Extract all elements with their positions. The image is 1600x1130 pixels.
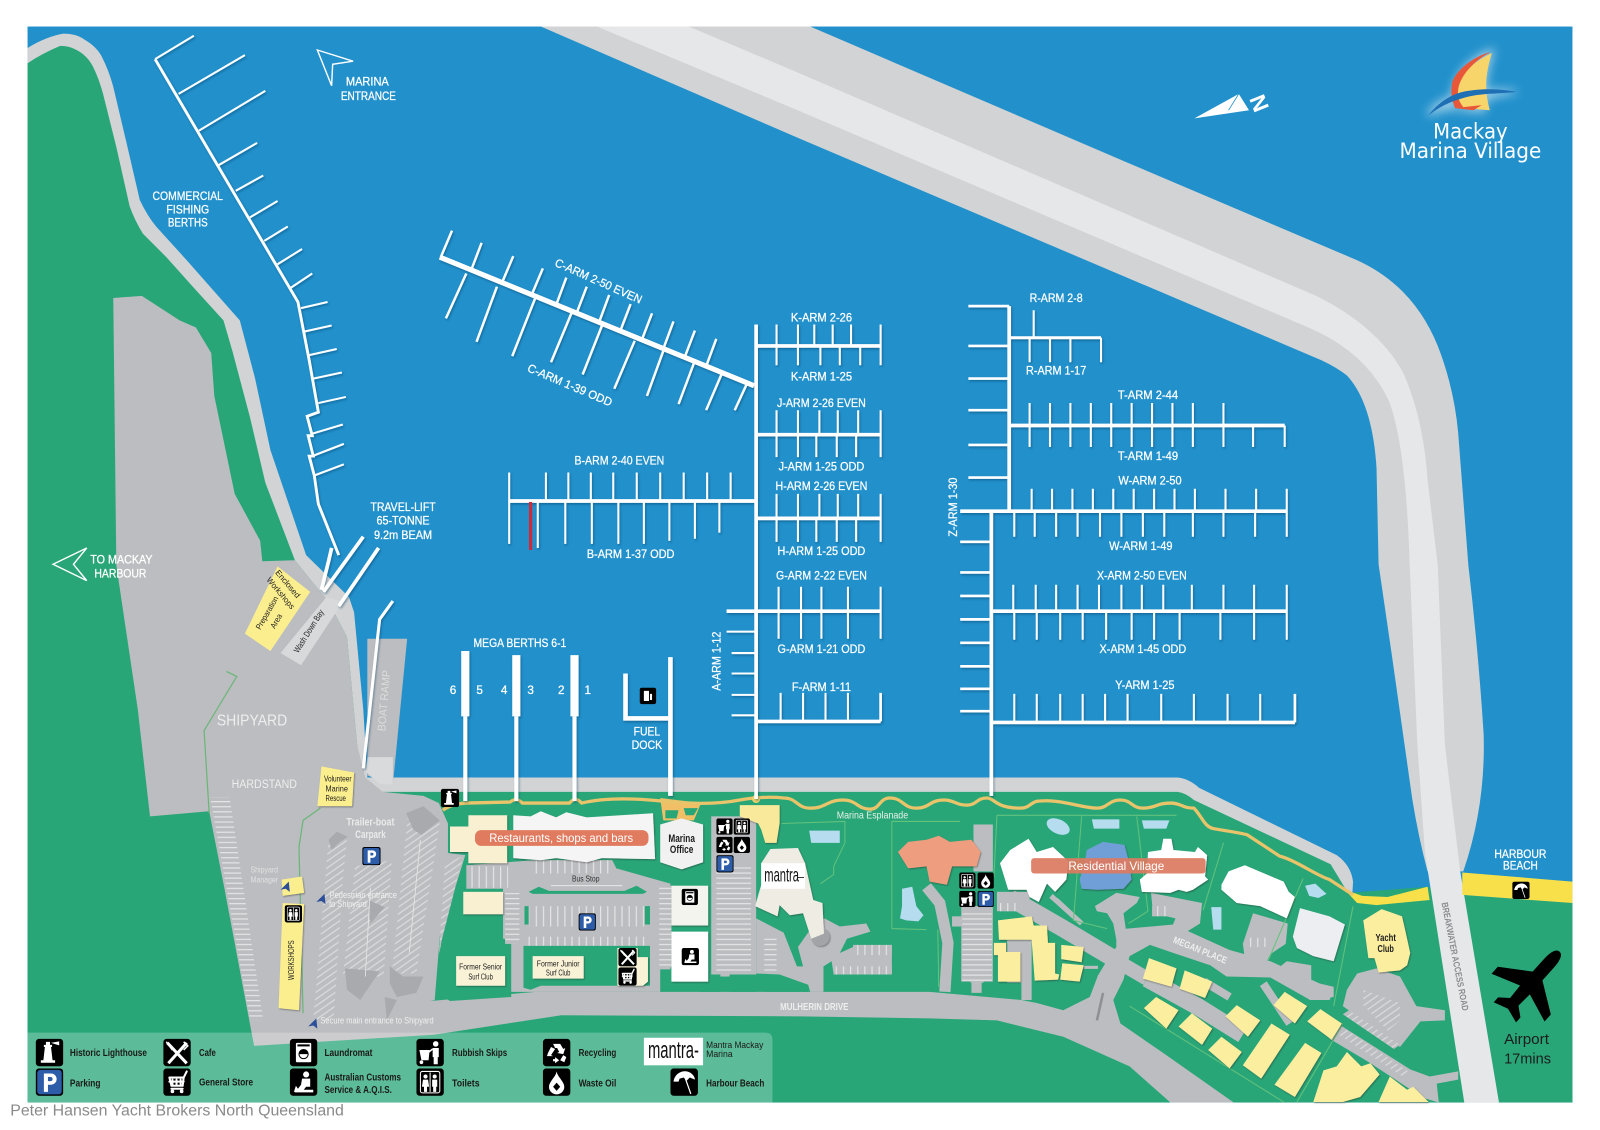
arm labels R to Y: X-ARM 2-50 EVEN — [1097, 570, 1187, 583]
travel lift label — [370, 501, 436, 542]
shipyard labels: Trailer-boat — [346, 817, 395, 829]
western green block — [437, 889, 511, 1001]
icon: beach — [1512, 882, 1530, 899]
residential white building 3 — [1221, 865, 1295, 918]
label: Residential Village — [1031, 858, 1206, 873]
marina entrance label — [341, 76, 396, 103]
vertical arm labels — [710, 477, 960, 691]
volunteer marine rescue: Marine — [326, 783, 348, 793]
residential grey building — [1293, 908, 1345, 961]
legend: general store: General Store — [199, 1078, 253, 1089]
vertical arm labels: Z-ARM 1-30 — [947, 477, 960, 537]
residential road network — [997, 892, 1334, 1035]
legend: toilets — [416, 1068, 480, 1096]
mega berths labels: 6 — [450, 684, 456, 697]
green bars and lower block — [523, 906, 650, 990]
yacht club: Yacht — [1376, 933, 1396, 944]
shipyard and Mulherin Drive — [113, 296, 1234, 1103]
legend: customs — [290, 1068, 401, 1096]
legend: toilets: Toilets — [452, 1079, 480, 1090]
arm labels R to Y: T-ARM 1-49 — [1118, 450, 1178, 463]
legend: customs: Service & A.Q.I.S. — [324, 1085, 392, 1096]
legend: customs: Australian Customs — [324, 1073, 401, 1084]
thin green path lines — [204, 671, 320, 1013]
travel lift label: 65-TONNE — [377, 514, 430, 527]
fuel dock label: DOCK — [632, 739, 662, 752]
Z-arm and R spine — [960, 306, 1009, 796]
volunteer marine rescue: Volunteer — [324, 774, 352, 784]
former senior surf club: Surf Club — [468, 972, 493, 982]
arm labels R to Y — [1026, 292, 1187, 692]
volunteer marine rescue: Rescue — [326, 793, 346, 803]
legend: waste oil — [543, 1068, 616, 1096]
to Mackay Harbour label: HARBOUR — [94, 568, 146, 581]
legend: waste oil: Waste Oil — [579, 1079, 616, 1090]
shipyard labels: Manager — [251, 876, 278, 885]
road labels — [780, 810, 1470, 1013]
C arm labels: C-ARM 1-39 ODD — [525, 362, 614, 409]
road labels: MEGAN PLACE — [1171, 935, 1229, 967]
B arm labels: B-ARM 2-40 EVEN — [574, 454, 664, 467]
mega berths — [465, 651, 574, 801]
legend: parking — [36, 1068, 101, 1096]
arm labels K to F: G-ARM 1-21 ODD — [778, 643, 865, 656]
K arm — [756, 324, 881, 365]
shopping area bay strips — [469, 860, 671, 967]
shipyard labels: HARDSTAND — [232, 778, 297, 791]
legend: harbour beach — [670, 1068, 764, 1096]
legend: harbour beach: Harbour Beach — [706, 1079, 764, 1090]
fuel dock pier — [626, 657, 670, 796]
icon: store in village — [618, 967, 637, 986]
arrow: marina entrance — [317, 50, 353, 86]
restaurants building — [513, 811, 655, 862]
arm labels R to Y: X-ARM 1-45 ODD — [1099, 643, 1186, 656]
footer credit: Peter Hansen Yacht Brokers North Queensland — [10, 1102, 344, 1119]
B arm — [509, 472, 756, 548]
legend: general store — [163, 1068, 253, 1096]
arm labels K to F — [776, 311, 867, 694]
A-arm stubs — [727, 632, 756, 715]
Marina Esplanade walkway — [443, 795, 1353, 895]
harbour beach sand — [1462, 872, 1572, 903]
red B-arm finger — [529, 502, 532, 550]
icon: east cluster — [959, 872, 994, 907]
cream building beside restaurants — [450, 815, 507, 863]
arm labels R to Y: W-ARM 2-50 — [1118, 475, 1182, 488]
fuel dock label: FUEL — [634, 726, 661, 739]
arm labels K to F: K-ARM 2-26 — [791, 311, 852, 324]
arm labels K to F: F-ARM 1-11 — [792, 681, 851, 694]
pedestrian entrance label: to Shipyard — [329, 899, 367, 909]
pedestrian entrance label: Pedestrian entrance — [330, 890, 397, 900]
F arm — [756, 693, 881, 721]
pools — [809, 815, 1327, 930]
J arm — [756, 410, 881, 457]
T arm — [1009, 403, 1285, 447]
customs block — [671, 932, 708, 982]
thin green estate lines — [782, 815, 1353, 1102]
icon: shopping parking — [579, 913, 596, 931]
harbour beach label: BEACH — [1503, 859, 1538, 872]
central green lens with bus stop: Bus Stop — [572, 874, 600, 884]
main A-arm spine — [754, 324, 758, 799]
marina office: Marina — [668, 833, 696, 845]
legend: historic lighthouse — [36, 1039, 147, 1066]
manager's office — [282, 877, 304, 896]
volunteer marine rescue — [317, 766, 354, 806]
arm labels R to Y: T-ARM 2-44 — [1118, 389, 1179, 402]
commercial fishing berths label: FISHING — [166, 203, 209, 216]
wash down bay: Wash Down Bay — [291, 607, 326, 654]
shipyard labels: Carpark — [355, 829, 386, 841]
airport label: 17mins — [1504, 1051, 1551, 1067]
commercial fishing berths label: BERTHS — [168, 217, 208, 230]
residential white building 1 — [1000, 839, 1068, 902]
mega berths labels: 4 — [501, 684, 508, 697]
yacht club carpark — [1330, 968, 1458, 1103]
road labels: BREAKWATER ACCESS ROAD — [1440, 902, 1470, 1012]
former senior surf club: Former Senior — [459, 961, 502, 971]
C arm — [440, 231, 754, 410]
harbour beach label — [1494, 848, 1546, 872]
enclosed workshops and preparation area: Enclosed — [273, 568, 302, 600]
yacht club — [1363, 909, 1410, 972]
legend: recycling: Recycling — [579, 1048, 616, 1059]
boat ramp pier — [363, 601, 393, 768]
W arm — [960, 489, 1287, 537]
mega berths labels: MEGA BERTHS 6-1 — [473, 637, 566, 650]
icon: carpark parking — [362, 847, 381, 865]
mega berths labels: 1 — [584, 684, 591, 697]
general store building — [617, 948, 648, 986]
B arm labels — [574, 454, 674, 561]
residential blue building — [1080, 842, 1132, 890]
road labels: Marina Esplanade — [837, 810, 908, 821]
pink building — [898, 836, 981, 885]
mega berths labels: 3 — [527, 684, 534, 697]
shipyard edge parking — [210, 797, 263, 1020]
arm labels R to Y: Y-ARM 1-25 — [1115, 679, 1175, 692]
icon: lighthouse on foreshore — [441, 789, 459, 807]
travel lift label: TRAVEL-LIFT — [370, 501, 436, 514]
cream block — [463, 892, 503, 914]
arm labels K to F: J-ARM 1-25 ODD — [779, 460, 864, 473]
enclosed workshops and preparation area: Workshops — [265, 576, 296, 611]
workshops building: WORKSHOPS — [286, 940, 296, 980]
residential white building 2 — [1140, 839, 1208, 893]
former junior surf club: Former Junior — [537, 958, 580, 968]
arm labels K to F: K-ARM 1-25 — [791, 371, 852, 384]
mega berths labels: 5 — [476, 684, 483, 697]
legend: mantra: mantra- — [648, 1037, 699, 1064]
legend: mantra: Mantra Mackay — [706, 1040, 764, 1050]
north arrow: N — [1244, 91, 1274, 116]
airport label: Airport — [1504, 1032, 1549, 1048]
G arm — [727, 587, 881, 639]
legend panel — [28, 1033, 772, 1103]
shipyard labels — [217, 713, 395, 885]
legend: mantra: Marina — [706, 1049, 733, 1059]
icon: laundromat in village — [682, 889, 698, 905]
workshops building — [279, 903, 304, 1010]
arrow: to Mackay Harbour — [53, 548, 87, 581]
seawall and foreshore — [28, 34, 1353, 918]
B arm labels: B-ARM 1-37 ODD — [587, 548, 674, 561]
former senior surf club — [456, 956, 505, 986]
former junior surf club — [533, 956, 584, 979]
trailer-boat carpark hatch — [313, 806, 463, 1020]
small beach — [1345, 887, 1430, 905]
legend: cafe — [163, 1039, 216, 1066]
shipyard labels: SHIPYARD — [217, 713, 287, 730]
village parking loop — [466, 860, 670, 992]
mantra building end circle — [811, 928, 830, 946]
commercial fishing berths label — [153, 190, 223, 230]
mantra sign — [761, 863, 805, 889]
arm labels K to F: H-ARM 2-26 EVEN — [776, 480, 867, 493]
to Mackay Harbour label — [90, 553, 153, 581]
legend: rubbish skips: Rubbish Skips — [452, 1048, 507, 1059]
icon: airplane — [1478, 928, 1586, 1036]
central parking east — [927, 824, 998, 993]
icon: customs in village — [682, 948, 699, 965]
H arm — [756, 494, 881, 542]
arm labels K to F: H-ARM 1-25 ODD — [778, 545, 865, 558]
small blue arrows — [281, 882, 326, 1029]
yellow residential houses — [994, 916, 1429, 1102]
C arm labels — [525, 256, 644, 409]
legend: cafe: Cafe — [199, 1048, 216, 1059]
to Mackay Harbour label: TO MACKAY — [90, 553, 153, 566]
airport label — [1504, 1032, 1551, 1067]
boat ramp: BOAT RAMP — [376, 670, 393, 732]
harbour beach label: HARBOUR — [1494, 848, 1546, 861]
arm labels K to F: J-ARM 2-26 EVEN — [777, 397, 866, 410]
label: Restaurants, shops and bars: Restaurants, shops and bars — [489, 832, 633, 845]
legend: mantra — [644, 1037, 764, 1065]
Y arm — [991, 694, 1295, 722]
buildings — [279, 766, 1429, 1102]
road labels: MULHERIN DRIVE — [780, 1002, 849, 1013]
icon: cafe in village — [618, 948, 637, 966]
vertical arm labels: A-ARM 1-12 — [710, 632, 723, 691]
mega berths labels: 2 — [558, 684, 564, 697]
secure entrance label: Secure main entrance to Shipyard — [320, 1015, 434, 1025]
legend: laundromat: Laundromat — [324, 1048, 373, 1059]
logo: Mackay Marina Village: Mackay — [1433, 119, 1508, 144]
breakwater — [541, 27, 1499, 1103]
wash down bay — [281, 597, 343, 665]
enclosed workshops and preparation area: Preparation — [254, 595, 280, 631]
legend: historic lighthouse: Historic Lighthouse — [70, 1048, 147, 1059]
logo: Mackay Marina Village: Marina Village — [1399, 139, 1541, 164]
boat ramp — [366, 639, 407, 785]
mantra forecourt and parking — [700, 816, 892, 992]
marina office — [660, 818, 703, 869]
travel lift label: 9.2m BEAM — [374, 529, 432, 542]
mantra sign: mantra — [764, 865, 799, 887]
marina office: Office — [670, 844, 693, 856]
marina entrance label: MARINA — [346, 76, 389, 89]
pedestrian entrance label — [329, 890, 397, 909]
X arm — [991, 585, 1287, 640]
arm labels K to F: G-ARM 2-22 EVEN — [776, 570, 867, 583]
piers — [155, 36, 1295, 801]
arm labels R to Y: W-ARM 1-49 — [1109, 540, 1172, 553]
arm labels R to Y: R-ARM 2-8 — [1030, 292, 1083, 305]
commercial fishing berths — [155, 36, 346, 555]
legend: parking: Parking — [70, 1079, 101, 1090]
mega berths labels — [450, 637, 591, 697]
marina entrance label: ENTRANCE — [341, 90, 396, 103]
C arm labels: C-ARM 2-50 EVEN — [553, 256, 644, 307]
east esplanade building — [740, 805, 780, 843]
breakwater access road — [597, 27, 1499, 1103]
shipyard labels: Shipyard — [251, 865, 278, 874]
legend: laundromat — [290, 1039, 373, 1066]
central green lens with bus stop — [529, 874, 647, 894]
icon: workshop toilets — [285, 905, 302, 922]
laundromat block — [671, 886, 708, 926]
R arm — [1009, 310, 1101, 362]
commercial fishing berths label: COMMERCIAL — [153, 190, 223, 203]
fuel dock label — [632, 726, 662, 752]
icon: fuel — [640, 688, 656, 704]
label: Residential Village: Residential Village — [1068, 860, 1164, 873]
yacht club: Club — [1378, 944, 1394, 955]
legend: rubbish skips — [416, 1039, 507, 1066]
enclosed workshops and preparation area: Area — [269, 612, 284, 630]
north arrow — [1194, 91, 1274, 118]
mantra building — [755, 848, 824, 939]
former junior surf club: Surf Club — [546, 968, 571, 978]
icon: skips cluster — [716, 818, 750, 872]
travel-lift piers — [321, 537, 379, 606]
legend: recycling — [543, 1039, 616, 1066]
arm labels R to Y: R-ARM 1-17 — [1026, 364, 1086, 377]
logo: Mackay Marina Village — [1399, 51, 1541, 164]
enclosed workshops and preparation area — [245, 566, 310, 651]
